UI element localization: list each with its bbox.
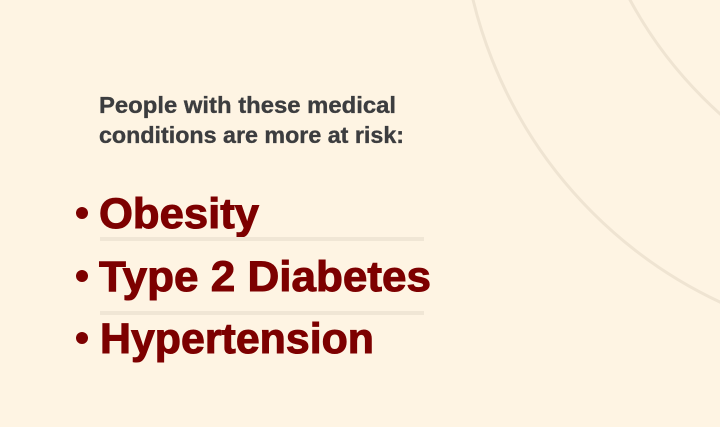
list item: Obesity: Obesity xyxy=(99,190,259,238)
list item: Type 2 Diabetes: Type 2 Diabetes xyxy=(99,253,431,301)
intro heading xyxy=(99,92,404,148)
intro heading: conditions are more at risk: xyxy=(99,122,404,148)
divider 1 xyxy=(100,237,424,241)
list item: Hypertension: Hypertension xyxy=(100,315,374,363)
decorative outer arc xyxy=(460,0,720,344)
intro heading: People with these medical xyxy=(99,92,396,118)
decorative inner arc xyxy=(580,0,720,221)
divider 2 xyxy=(100,311,424,315)
